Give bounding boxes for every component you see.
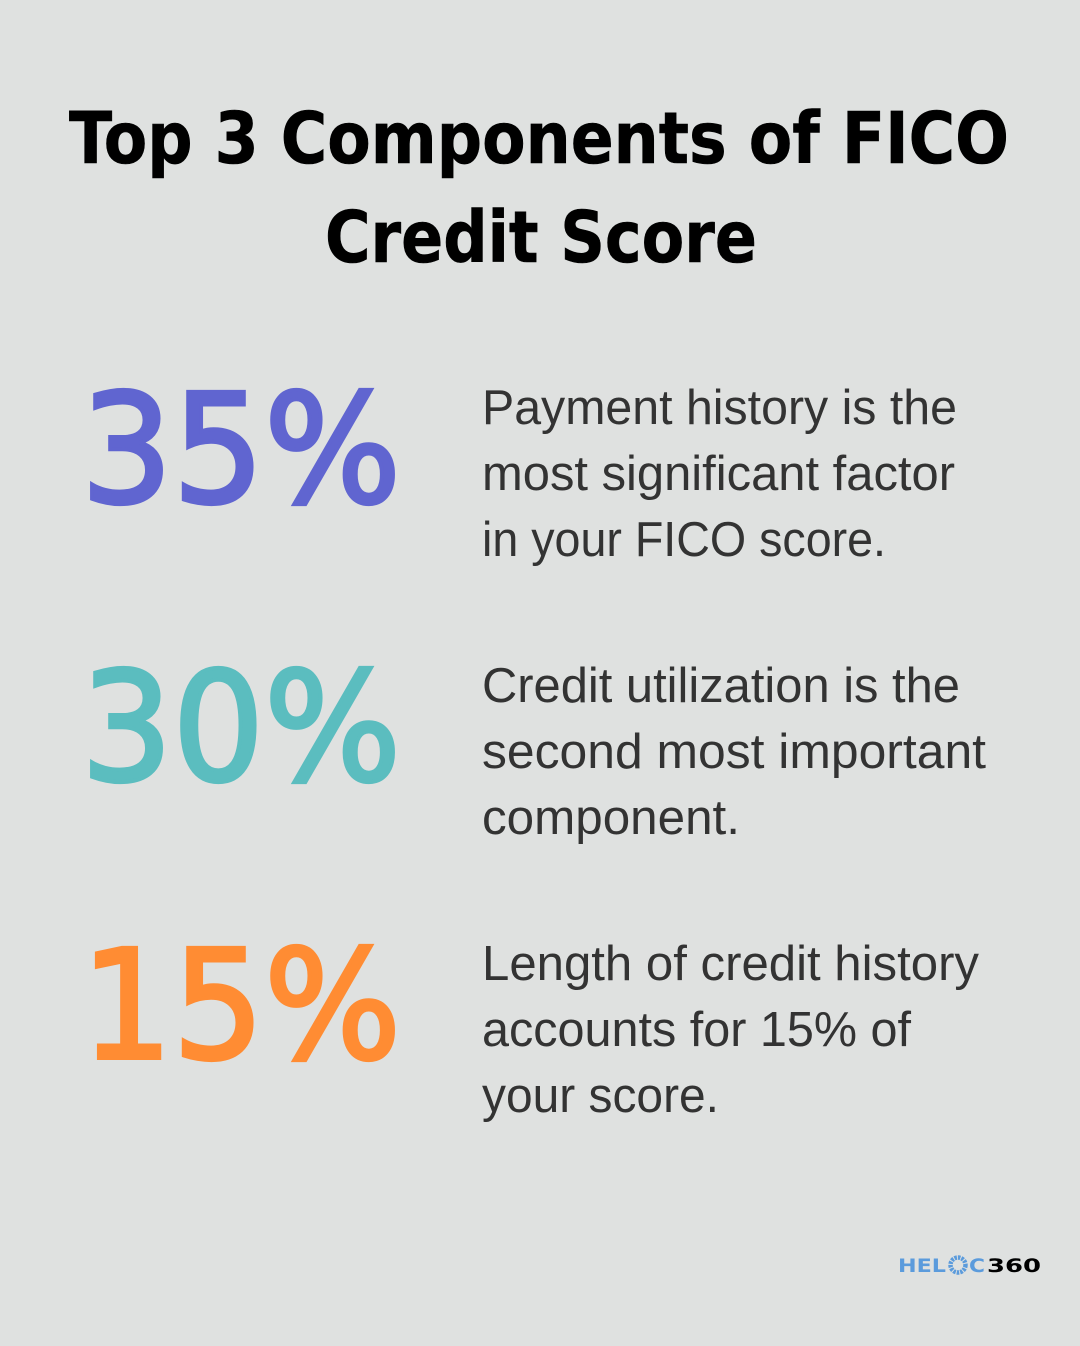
description: payment history: in your FICO score. <box>482 513 886 567</box>
figure: 15%: 15% <box>81 918 401 1094</box>
title: Credit Score <box>325 196 757 279</box>
stat: 35% payment history <box>81 362 957 567</box>
description: length of credit history: your score. <box>482 1069 719 1123</box>
description: credit utilization: Credit utilization is the <box>482 659 960 713</box>
stat: 15% length of credit history <box>81 918 980 1123</box>
description: length of credit history: accounts for 15% of <box>482 1003 911 1057</box>
logo: HELOC360 <box>898 1255 1041 1277</box>
description: credit utilization: component. <box>482 791 740 845</box>
logo: HELOC360: 360 <box>987 1255 1041 1277</box>
description: payment history: most significant factor <box>482 447 955 501</box>
description: credit utilization <box>482 659 986 845</box>
figure: 35%: 35% <box>81 362 401 538</box>
stat: 30% credit utilization <box>81 640 986 845</box>
logo: HELOC360: HEL <box>898 1255 946 1277</box>
icon: logo turbine ring <box>950 1258 966 1272</box>
figure: 30%: 30% <box>81 640 401 816</box>
description: length of credit history: Length of credit history <box>482 937 980 991</box>
description: payment history <box>482 381 957 567</box>
description: credit utilization: second most important <box>482 725 986 779</box>
description: payment history: Payment history is the <box>482 381 957 435</box>
title <box>69 97 1009 279</box>
logo: HELOC360: C <box>969 1255 985 1277</box>
description: length of credit history <box>482 937 980 1123</box>
